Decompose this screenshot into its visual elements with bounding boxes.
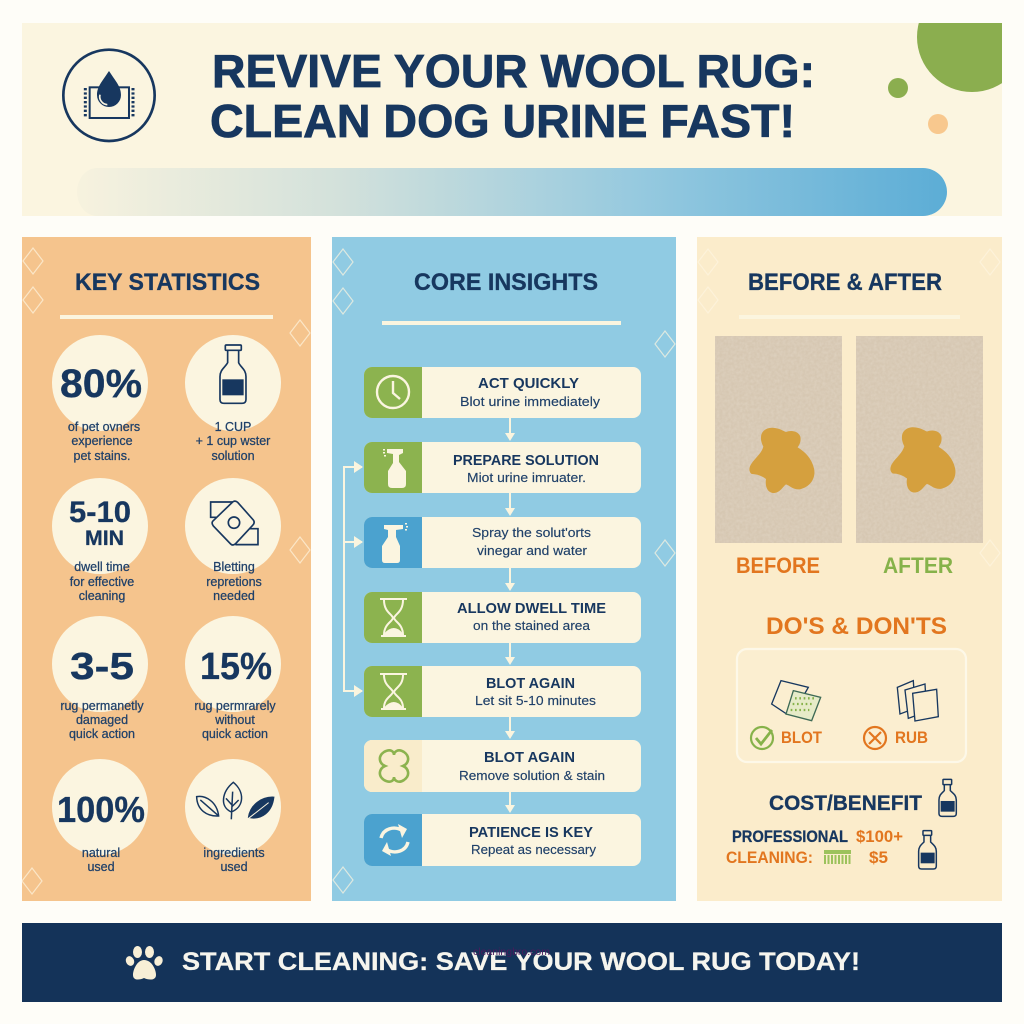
step: act quickly [364,367,641,418]
gradient bar [77,168,947,216]
heading: key statistics: KEY STATISTICS [75,269,260,296]
stat: 15%: rug permrarely [194,699,276,713]
step: spray the solution: vinegar and water [477,543,588,558]
stat: vinegar bottle: + 1 cup wster [196,434,270,448]
stat: 15%: 15% [200,646,272,688]
small green dot [888,78,908,98]
stat: ingredients [185,759,281,874]
panel: key statistics [22,237,311,901]
heading: before and after: BEFORE & AFTER [748,269,942,296]
icon: spray bottle [383,449,406,488]
step: act quickly: Blot urine immediately [460,394,601,409]
icon: repeat arrows [381,824,408,856]
icon: clock [377,376,409,408]
step: blot again, remove: BLOT AGAIN [484,749,575,766]
title [210,45,815,147]
panel: core insights [332,237,676,901]
stat: 100% natural: 100% [57,789,145,830]
icon: check [751,727,773,749]
small orange dot [928,114,948,134]
stat: 80%: experience [71,434,133,448]
footer banner [22,923,1002,1002]
stat: 3-5: quick action [69,727,135,741]
label: after: AFTER [883,553,953,578]
step: prepare solution: PREPARE SOLUTION [453,452,599,469]
stat: 5-10 min: MIN [85,527,124,550]
icon: paw [124,946,164,980]
heading: core insights: CORE INSIGHTS [414,269,598,296]
icon: blotting cloths [211,501,258,545]
step: prepare solution: Miot urine imruater. [467,470,586,485]
step: blot again, let sit: Let sit 5-10 minutes [475,693,597,708]
stat: ingredients: ingredients [203,846,265,860]
cost comparison: CLEANING: [726,849,813,867]
stat: blotting repetitions: Bletting [213,560,255,574]
stat: 100% natural: used [87,860,115,874]
icon: blot cloths [772,681,821,721]
stat: 15%: quick action [202,727,268,741]
step: allow dwell time: ALLOW DWELL TIME [457,600,606,617]
step: patience is key [364,814,641,866]
stat: 15%: without [214,713,255,727]
step: allow dwell time [364,592,641,643]
title: REVIVE YOUR WOOL RUG: [212,45,815,97]
stat: 15% [185,616,281,741]
step arrows [505,418,515,813]
stat: 3-5: rug permanetly [60,699,144,713]
icon: hourglass [380,599,407,636]
stat: 3-5: 3-5 [70,646,134,688]
icon: bottle bottom [919,831,936,869]
label: before: BEFORE [736,553,820,578]
stat: 80%: 80% [60,362,142,406]
decorative green circle [917,23,1002,92]
stat: blotting repetitions: needed [213,589,255,603]
stat: 5-10 min [52,478,148,603]
stat: 100% natural [52,759,148,874]
step: blot again, remove: Remove solution & stain [459,768,605,783]
icon: water drop on rug [63,50,155,141]
box: dos and donts [737,649,966,762]
watermark: cleaningbro.com [473,946,550,958]
label: rub: RUB [895,728,928,747]
step: patience is key: Repeat as necessary [471,842,597,857]
stat: 80%: pet stains. [74,449,130,463]
cost comparison [726,827,903,867]
stat: 3-5 [52,616,148,741]
icon: clover cloth [380,750,408,782]
icon: cross [864,727,886,749]
loop-back arrows [344,461,363,697]
title: CLEAN DOG URINE FAST! [210,95,795,147]
stat: vinegar bottle: solution [211,449,255,463]
step: spray the solution [364,517,641,568]
label: blot: BLOT [781,728,823,747]
icon: hourglass [380,674,407,709]
stat: 80% [52,335,148,463]
stat: 100% natural: natural [82,846,120,860]
cost comparison: $5 [869,848,888,867]
stat: vinegar bottle: 1 CUP [215,420,251,434]
step: act quickly: ACT QUICKLY [478,375,579,392]
step: prepare solution [364,442,641,493]
step: blot again, remove [364,740,641,792]
heading: cost benefit: COST/BENEFIT [769,792,922,815]
stat: 5-10 min: 5-10 [69,496,131,529]
stat: vinegar bottle [185,335,281,463]
icon: bottle top [939,779,956,816]
cost comparison: $100+ [856,827,903,846]
stat: 5-10 min: for effective [70,575,134,589]
photo: before rug [715,336,842,543]
stat: 80%: of pet ovners [68,420,140,434]
icon: brush [824,850,851,864]
stat: blotting repetitions: repretions [206,575,262,589]
header panel [22,23,1002,216]
stat: ingredients: used [220,860,248,874]
cost comparison: PROFESSIONAL [732,828,848,846]
stat: 5-10 min: cleaning [79,589,125,603]
stat: 3-5: damaged [76,713,128,727]
call to action: START CLEANING: SAVE YOUR WOOL RUG TODAY! [182,948,860,976]
heading: dos and donts: DO'S & DON'TS [766,613,947,640]
step: blot again, let sit: BLOT AGAIN [486,675,575,692]
stat: 5-10 min: dwell time [74,560,130,574]
step: blot again, let sit [364,666,641,717]
step: allow dwell time: on the stained area [473,618,591,633]
icon: bottle [220,345,246,403]
step: spray the solution: Spray the solut'orts [472,525,592,540]
icon: leaves [197,782,274,819]
panel: before and after [697,237,1002,901]
icon: rub cloths [897,681,938,721]
step: patience is key: PATIENCE IS KEY [469,824,593,841]
photo: after rug [856,336,983,543]
icon: spray bottle blue [382,523,408,563]
stat: blotting repetitions [185,478,281,603]
